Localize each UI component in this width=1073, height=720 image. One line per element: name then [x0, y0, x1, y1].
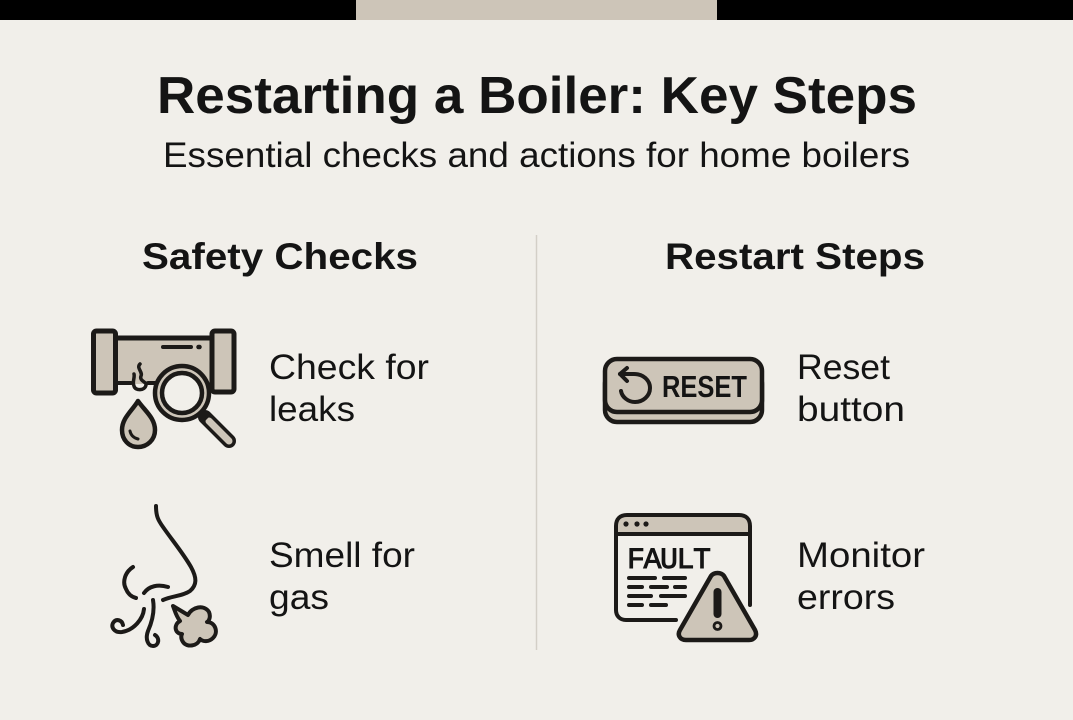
panel: restart steps [605, 236, 925, 640]
icon: fault window with warning: FAULT [627, 544, 711, 578]
icon: fault window with warning [616, 515, 756, 640]
icon: reset button: RESET [662, 369, 747, 404]
heading: safety checks: Safety Checks [142, 236, 418, 277]
label: smell for gas: Smell for [269, 536, 415, 575]
top bar [0, 0, 1073, 20]
panel: safety checks [94, 236, 429, 646]
label: monitor errors: errors [797, 578, 895, 617]
label: reset button: button [797, 390, 905, 429]
title: Restarting a Boiler: Key Steps [157, 67, 917, 125]
icon: reset button [605, 359, 762, 422]
subtitle: Essential checks and actions for home boilers [163, 136, 910, 175]
label: check for leaks: Check for [269, 348, 429, 387]
heading: restart steps: Restart Steps [665, 236, 925, 277]
icon: pipe leak with magnifier [94, 331, 234, 447]
label: monitor errors: Monitor [797, 536, 925, 575]
icon: nose smelling gas [112, 506, 216, 646]
label: smell for gas: gas [269, 578, 329, 617]
label: reset button: Reset [797, 348, 890, 387]
label: check for leaks: leaks [269, 390, 355, 429]
